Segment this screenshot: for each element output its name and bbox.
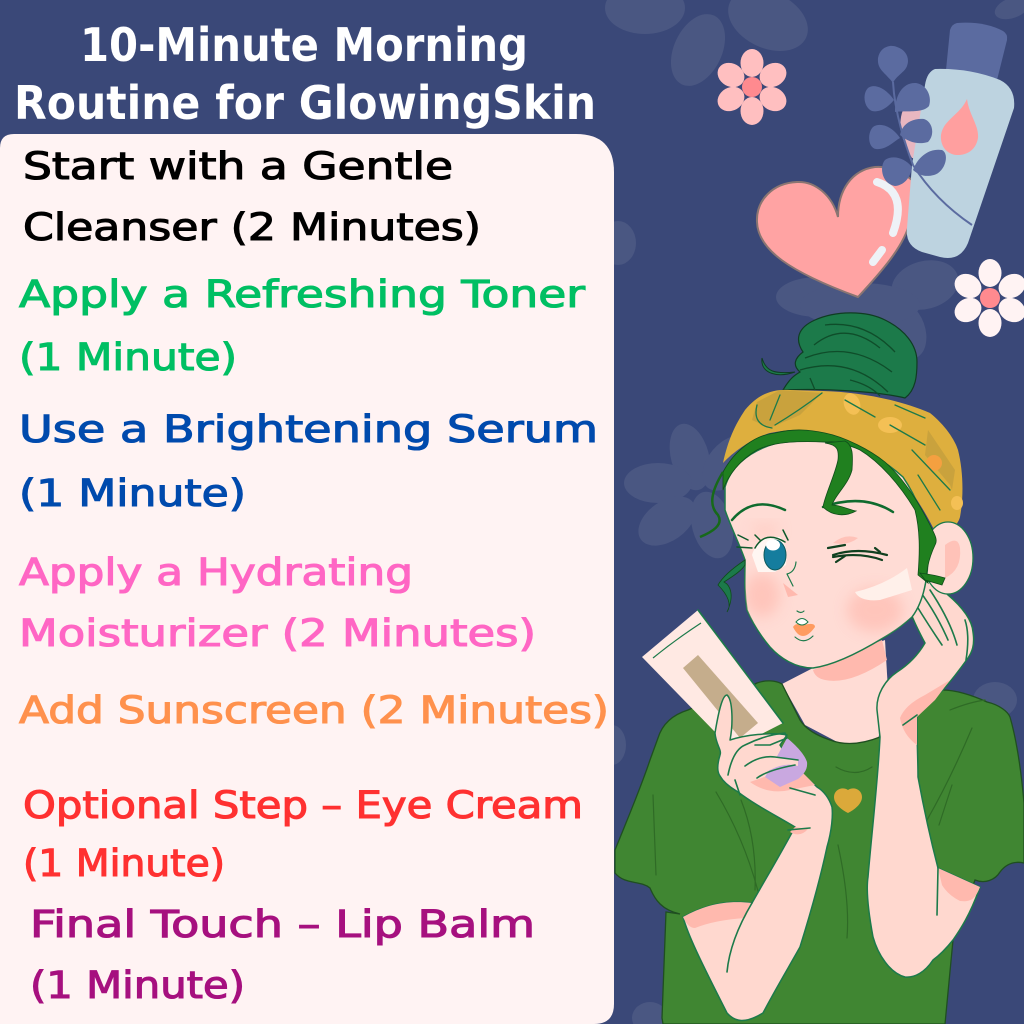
step 4 text: Apply a Hydrating [19, 551, 413, 594]
step 3 text [19, 408, 598, 515]
step 3 text: Use a Brightening Serum [19, 408, 598, 451]
icon: small heart on shirt [834, 788, 862, 813]
heart [757, 167, 912, 297]
fingers of holding hand [727, 733, 815, 972]
title: Routine for GlowingSkin [14, 76, 596, 130]
icon: white flower [950, 259, 1024, 337]
eyebrows [732, 504, 785, 520]
step 2 text: (1 Minute) [19, 336, 237, 379]
shirt [615, 681, 1024, 1024]
step 1 text [23, 145, 481, 249]
step 7 text: Final Touch – Lip Balm [30, 903, 535, 946]
title [14, 18, 596, 130]
icon: toner bottle [907, 23, 1014, 258]
step 4 text: Moisturizer (2 Minutes) [19, 612, 536, 655]
winking eye [828, 545, 887, 562]
neck shadow [813, 640, 887, 681]
right arm and hand [867, 572, 980, 977]
sponge [765, 738, 807, 787]
panel: routine steps [0, 134, 614, 1024]
nose [783, 562, 798, 597]
illustration: girl applying skincare [615, 313, 1024, 1024]
step 4 text [19, 551, 536, 655]
faint background flowers [598, 0, 1024, 1024]
step 6 text: Optional Step – Eye Cream [23, 784, 583, 827]
step 1 text: Cleanser (2 Minutes) [23, 206, 481, 249]
step 7 text [30, 903, 535, 1007]
title: 10-Minute Morning [80, 18, 528, 72]
step 5 text: Add Sunscreen (2 Minutes) [19, 689, 609, 732]
step 1 text: Start with a Gentle [23, 145, 453, 188]
small pink shape behind leaves [900, 105, 925, 160]
step 7 text: (1 Minute) [30, 964, 245, 1007]
ear [923, 522, 973, 594]
step 6 text [23, 784, 583, 885]
neck [782, 640, 888, 745]
left arm and hand [683, 695, 832, 1021]
headband [723, 390, 963, 538]
icon: pink flower [713, 49, 791, 125]
step 2 text: Apply a Refreshing Toner [19, 273, 586, 316]
product tube [642, 610, 783, 745]
cream streak [855, 568, 912, 600]
face [725, 441, 928, 668]
step 2 text [19, 273, 586, 379]
left eye [737, 530, 788, 572]
green hair strands [700, 430, 945, 612]
hair bun [762, 313, 917, 398]
step 6 text: (1 Minute) [23, 842, 225, 885]
step 3 text: (1 Minute) [19, 472, 246, 515]
icon: leaf sprig [865, 46, 972, 225]
lips [793, 611, 815, 641]
